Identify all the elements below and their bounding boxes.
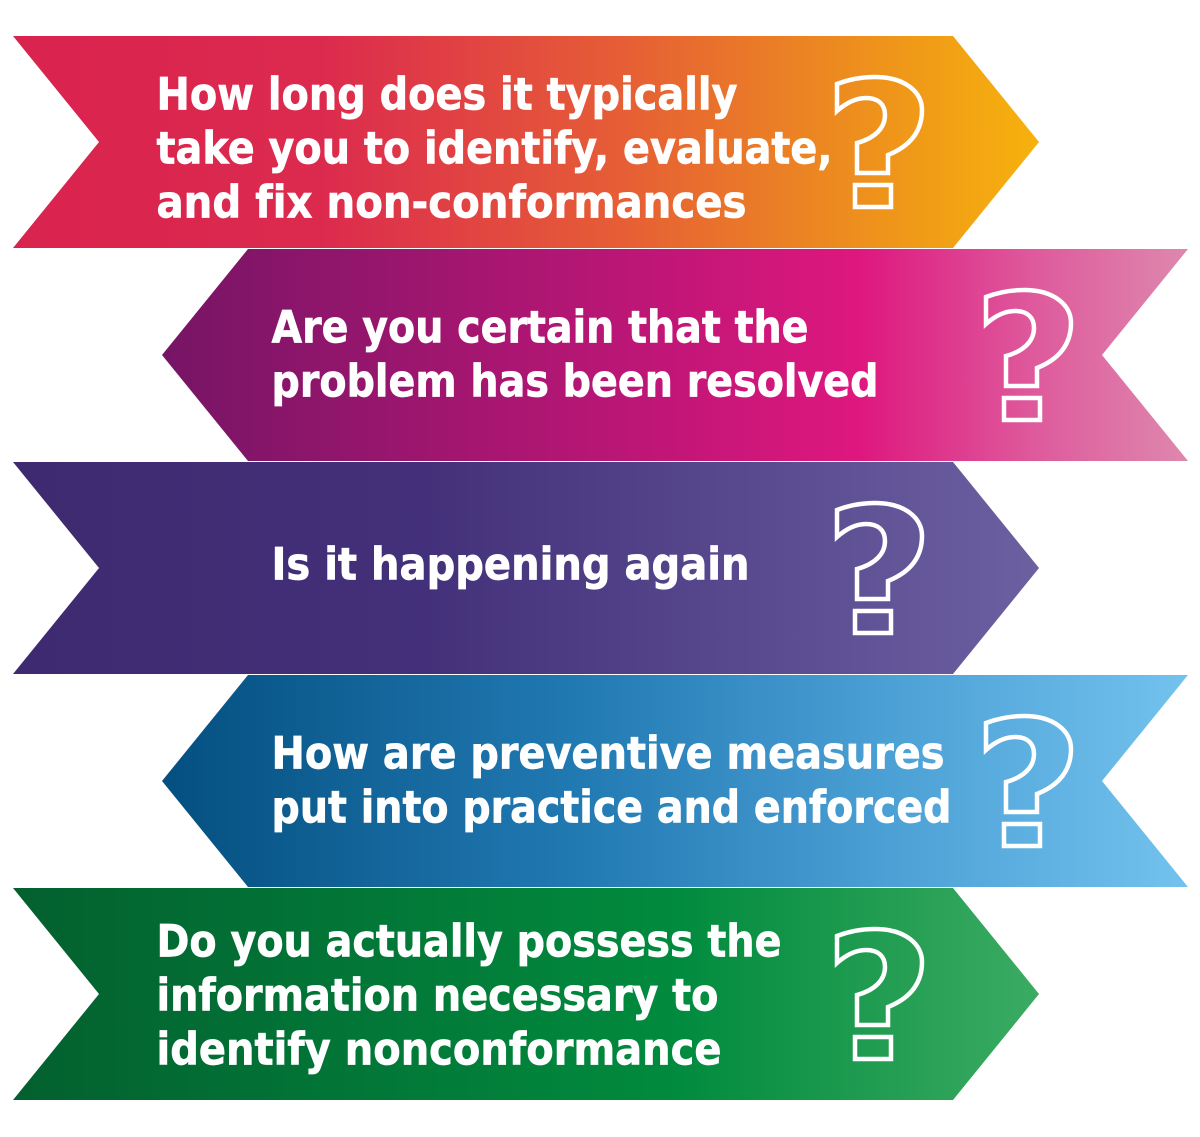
banner 1 question text: and fix non-conformances — [156, 178, 746, 228]
banner 2 arrow shape — [162, 249, 1188, 461]
icon: question mark outline 5 — [837, 929, 922, 1059]
icon: question mark outline 4 — [986, 716, 1071, 846]
icon: question mark outline 2 — [986, 290, 1071, 420]
banner 5 question text — [156, 916, 782, 1076]
banner 4 question text: put into practice and enforced — [272, 782, 952, 834]
banner 5 question text: Do you actually possess the — [156, 916, 782, 968]
banner 2 question text — [272, 302, 878, 408]
banner 3 arrow shape — [13, 462, 1039, 674]
banner 1 arrow shape — [13, 36, 1039, 248]
banner 5 arrow shape — [13, 888, 1039, 1100]
banner 4 arrow shape — [162, 675, 1188, 887]
banner 4 question text — [272, 728, 952, 834]
banner 3 question text: Is it happening again — [272, 540, 750, 590]
banner 1 question text: take you to identify, evaluate, — [156, 124, 832, 174]
panel: banner 4, preventive measures — [162, 675, 1188, 887]
panel: banner 3, recurrence — [13, 462, 1039, 674]
banner 1 question text — [156, 70, 832, 228]
banner 5 question text: information necessary to — [156, 970, 718, 1022]
panel: banner 1, time to fix non-conformances — [13, 36, 1039, 248]
banner 2 question text: Are you certain that the — [272, 302, 808, 354]
banner 2 question text: problem has been resolved — [272, 356, 878, 408]
banner 1 question text: How long does it typically — [156, 70, 738, 120]
icon: question mark outline 3 — [837, 503, 922, 633]
panel: banner 5, information availability — [13, 888, 1039, 1100]
banner 4 question text: How are preventive measures — [272, 728, 944, 780]
panel: banner 2, certainty of resolution — [162, 249, 1188, 461]
icon: question mark outline 1 — [837, 77, 922, 207]
banner 5 question text: identify nonconformance — [156, 1024, 722, 1076]
